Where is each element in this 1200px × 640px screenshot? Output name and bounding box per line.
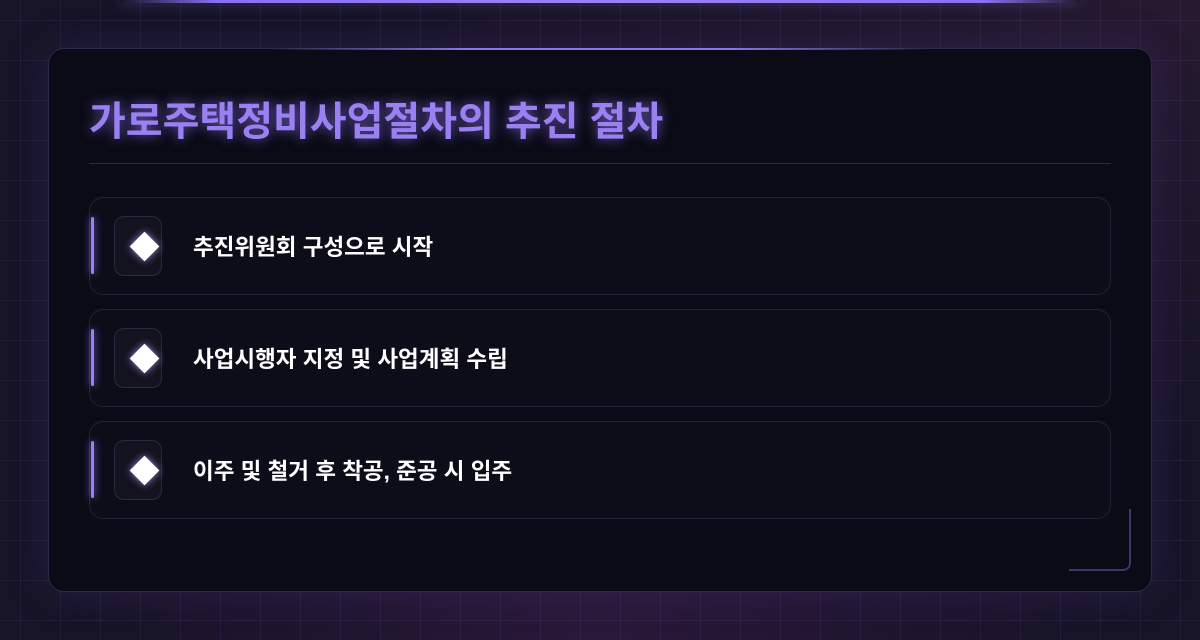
item 1 xyxy=(89,197,1111,295)
icon: diamond xyxy=(114,216,162,276)
item 2 xyxy=(89,309,1111,407)
item 3 xyxy=(89,421,1111,519)
text: step 1: 추진위원회 구성으로 시작 xyxy=(193,235,433,260)
top glow bar xyxy=(120,0,1080,3)
icon: diamond xyxy=(114,328,162,388)
text: step 3: 이주 및 철거 후 착공, 준공 시 입주 xyxy=(193,459,512,484)
title: 가로주택정비사업절차의 추진 절차 xyxy=(89,100,663,144)
panel: main card xyxy=(48,48,1152,592)
text: step 2: 사업시행자 지정 및 사업계획 수립 xyxy=(193,347,508,372)
icon: diamond xyxy=(114,440,162,500)
corner bracket xyxy=(1069,509,1131,571)
